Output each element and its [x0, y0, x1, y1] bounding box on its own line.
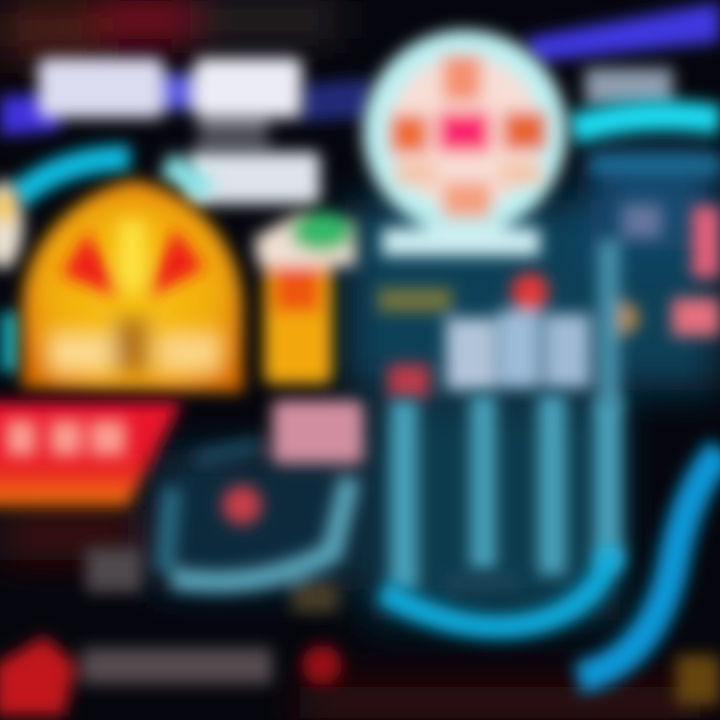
right panel cards	[378, 204, 720, 410]
wheel light segments	[48, 318, 222, 374]
teal columns	[390, 395, 622, 590]
lower centre diagram	[86, 400, 364, 612]
top purple bands	[0, 2, 720, 136]
left edge badge	[0, 181, 23, 372]
red banner	[0, 402, 182, 506]
cyan arcs	[16, 116, 720, 198]
footer	[0, 636, 720, 716]
heading	[38, 58, 673, 204]
round emblem	[363, 30, 567, 256]
cyan lower curves	[382, 450, 720, 678]
golden wheel	[22, 180, 243, 392]
orange column	[254, 212, 356, 384]
banner text blocks	[6, 420, 126, 456]
wheel red segments	[62, 220, 204, 298]
